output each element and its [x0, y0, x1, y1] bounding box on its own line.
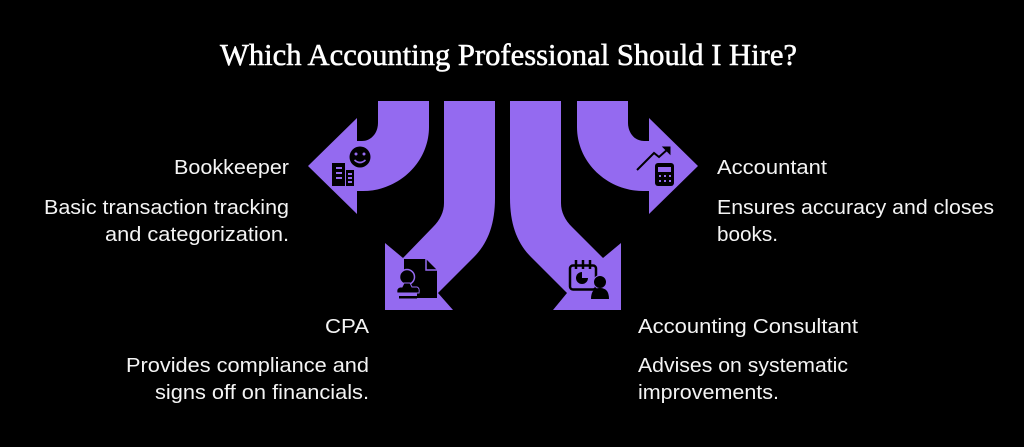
text: CPA description: Provides compliance and — [126, 355, 369, 377]
icon: building and smiley — [332, 146, 370, 186]
text: bookkeeper description — [44, 197, 289, 246]
arrow: bookkeeper — [308, 101, 429, 214]
text: CPA description — [126, 355, 369, 404]
icon: growth line and calculator — [637, 147, 674, 186]
text: bookkeeper description: and categorization. — [105, 224, 289, 246]
title: Which Accounting Professional Should I Hire? — [220, 37, 797, 72]
text: accounting consultant description — [638, 355, 848, 404]
text: accountant description: books. — [717, 224, 778, 246]
text: bookkeeper description: Basic transaction tracking — [44, 197, 289, 219]
label: bookkeeper: Bookkeeper — [174, 157, 289, 179]
arrow: accountant — [577, 101, 698, 214]
label: accountant: Accountant — [717, 157, 827, 179]
text: accounting consultant description: Advises on systematic — [638, 355, 848, 377]
text: accountant description: Ensures accuracy and closes — [717, 197, 994, 219]
label: accounting consultant: Accounting Consultant — [638, 316, 858, 338]
icon: document and stamp — [397, 259, 437, 298]
arrow: CPA — [385, 101, 495, 310]
text: CPA description: signs off on financials. — [155, 382, 369, 404]
label: CPA: CPA — [325, 316, 370, 338]
text: accountant description — [717, 197, 994, 246]
icon: calendar and person — [570, 260, 609, 299]
arrow: accounting consultant — [510, 101, 621, 310]
text: accounting consultant description: improvements. — [638, 382, 779, 404]
